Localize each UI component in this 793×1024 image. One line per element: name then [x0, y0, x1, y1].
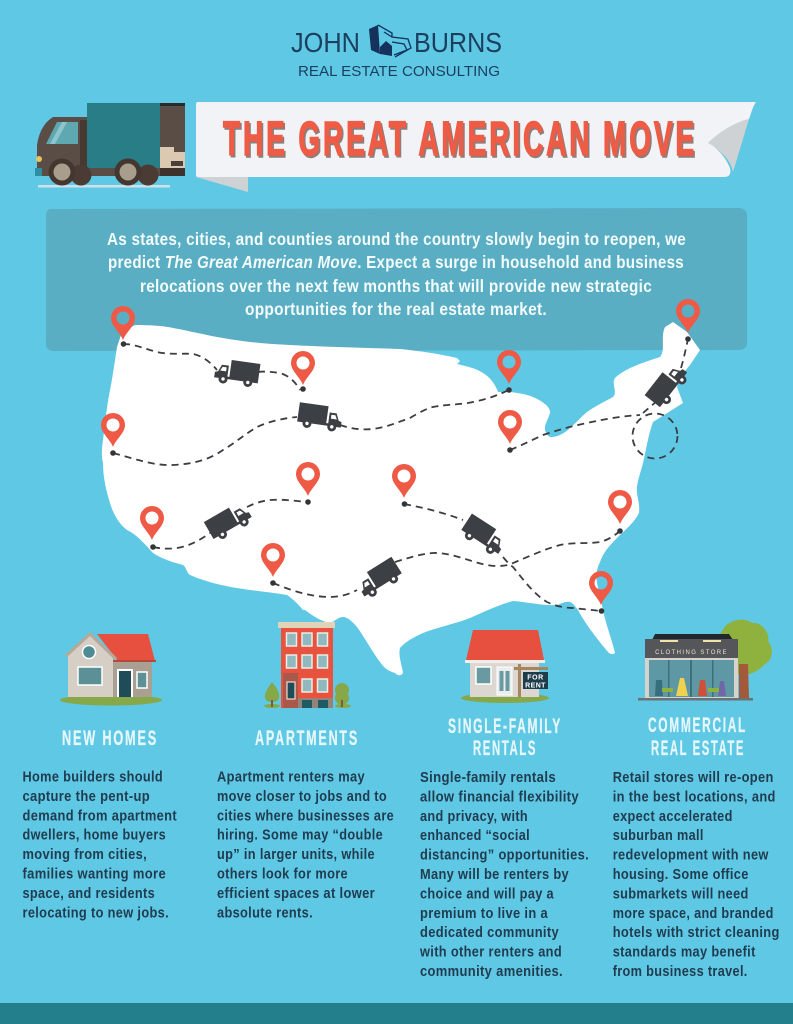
- text: single-family rentals: [419, 769, 589, 980]
- pin 6: [261, 543, 285, 577]
- intro text: opportunities for the real estate market.: [245, 299, 547, 319]
- route: southwest: [150, 499, 311, 550]
- text: single-family rentals: community amenities.: [420, 963, 563, 980]
- text: single-family rentals: dedicated community: [420, 924, 559, 941]
- logo: John Burns Real Estate Consulting: [291, 25, 502, 80]
- text: single-family rentals: and privacy, with: [420, 808, 528, 825]
- text: commercial real estate: suburban mall: [613, 827, 704, 844]
- pin 9: [498, 410, 522, 444]
- pin 10: [676, 299, 700, 333]
- text: new homes: moving from cities,: [22, 846, 147, 863]
- intro text: predict The Great American Move. Expect a surge in household and business: [108, 252, 684, 272]
- for rent sign: RENT: [525, 682, 546, 690]
- text: apartments: up” in larger units, while: [217, 846, 375, 863]
- intro text: As states, cities, and counties around the country slowly begin to reopen, we: [107, 229, 686, 249]
- text: commercial real estate: expect accelerated: [613, 808, 733, 825]
- text: single-family rentals: Many will be renters by: [420, 866, 569, 883]
- text: single-family rentals: premium to live in a: [420, 905, 548, 922]
- icon: rental house: [461, 630, 549, 703]
- text: apartments: hiring. Some may “double: [217, 827, 383, 844]
- heading: commercial real estate: [648, 713, 747, 760]
- logo: John Burns Real Estate Consulting: JOHN: [291, 27, 360, 58]
- intro text: [107, 229, 686, 319]
- heading: new homes: NEW HOMES: [62, 726, 158, 750]
- text: new homes: space, and residents: [22, 885, 155, 902]
- location pins: [101, 299, 700, 605]
- for rent sign: FOR: [527, 674, 544, 682]
- text: apartments: absolute rents.: [217, 904, 313, 921]
- truck 4: [354, 557, 404, 601]
- heading: apartments: APARTMENTS: [255, 726, 359, 750]
- intro text: relocations over the next few months that will provide new strategic: [140, 276, 652, 296]
- truck 2: [296, 402, 343, 433]
- US map: [102, 322, 700, 675]
- for rent sign: [523, 672, 548, 690]
- intro panel: [46, 208, 747, 351]
- truck 3: [204, 500, 254, 543]
- route: north central: [110, 387, 512, 465]
- truck 6: [645, 360, 691, 410]
- truck 1: [213, 358, 260, 388]
- text: apartments: cities where businesses are: [217, 807, 394, 824]
- text: commercial real estate: [613, 769, 780, 980]
- pin 7: [392, 464, 416, 498]
- icon: logo buildings: [369, 25, 411, 57]
- pin 8: [497, 350, 521, 384]
- pin 12: [589, 571, 613, 605]
- pin 4: [296, 462, 320, 496]
- footer bar: [0, 1003, 793, 1024]
- text: new homes: Home builders should: [22, 768, 163, 786]
- title banner: [196, 102, 756, 192]
- route: northwest: [121, 341, 306, 392]
- text: new homes: [22, 768, 177, 921]
- truck 5: [459, 513, 509, 558]
- pin 1: [111, 306, 135, 340]
- text: new homes: relocating to new jobs.: [22, 904, 169, 921]
- text: new homes: families wanting more: [22, 866, 166, 882]
- text: new homes: capture the pent-up: [22, 788, 150, 805]
- heading: single-family rentals: RENTALS: [473, 736, 537, 760]
- text: commercial real estate: redevelopment with new: [613, 847, 769, 864]
- text: single-family rentals: with other renters and: [419, 944, 562, 961]
- route: gulf: [402, 501, 604, 614]
- text: commercial real estate: submarkets will need: [613, 885, 749, 902]
- heading: single-family rentals: [448, 714, 562, 760]
- text: single-family rentals: choice and will pay a: [420, 885, 554, 902]
- text: commercial real estate: standards may benefit: [613, 944, 756, 961]
- heading: single-family rentals: SINGLE-FAMILY: [448, 714, 562, 738]
- icon: moving truck: [35, 103, 185, 188]
- text: single-family rentals: Single-family rentals: [420, 769, 556, 786]
- logo: John Burns Real Estate Consulting: BURNS: [414, 27, 502, 58]
- pin 2: [291, 351, 315, 385]
- text: new homes: demand from apartment: [22, 807, 177, 824]
- pin 5: [140, 506, 164, 540]
- text: apartments: [217, 768, 394, 921]
- pin 11: [608, 490, 632, 524]
- text: apartments: move closer to jobs and to: [217, 788, 387, 805]
- text: commercial real estate: from business travel.: [613, 963, 748, 980]
- icon: new home: [60, 634, 162, 706]
- text: apartments: others look for more: [217, 866, 348, 882]
- text: apartments: Apartment renters may: [217, 768, 365, 786]
- trucks on the map: [204, 358, 691, 601]
- route: south: [270, 528, 623, 597]
- text: single-family rentals: enhanced “social: [420, 827, 530, 844]
- logo: John Burns Real Estate Consulting: REAL ESTATE CONSULTING: [298, 63, 500, 80]
- text: commercial real estate: housing. Some office: [613, 866, 749, 883]
- text: single-family rentals: allow financial flexibility: [420, 788, 579, 805]
- route: northeast with loop: [507, 336, 691, 458]
- text: single-family rentals: distancing” opportunities.: [420, 847, 589, 864]
- text: new homes: dwellers, home buyers: [22, 827, 166, 844]
- icon: apartment building: [264, 622, 351, 708]
- text: apartments: efficient spaces at lower: [217, 885, 375, 902]
- icon: clothing store with tree: CLOTHING STORE: [655, 650, 728, 656]
- icon: clothing store with tree: [638, 620, 772, 700]
- pin 3: [101, 413, 125, 447]
